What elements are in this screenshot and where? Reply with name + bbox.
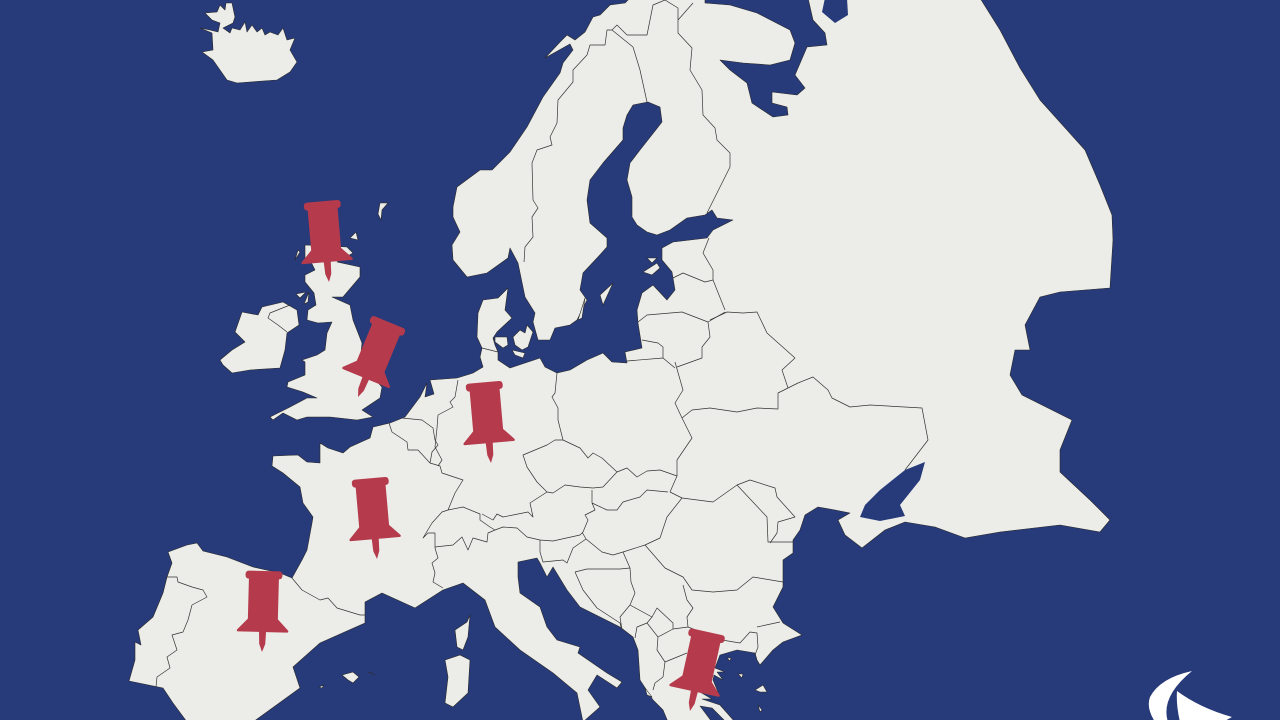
central Europe borders	[495, 373, 682, 563]
pin: Greece	[665, 626, 733, 717]
inland seas	[822, 0, 925, 521]
Sea of Azov	[860, 462, 925, 521]
Scottish isles	[295, 203, 388, 304]
Northern Ireland border	[268, 305, 290, 332]
Great Britain	[270, 245, 382, 420]
Ireland	[220, 302, 299, 373]
eastern Europe borders	[645, 312, 928, 592]
Sardinia	[445, 655, 470, 707]
pin: England	[334, 312, 413, 407]
country borders	[156, 0, 928, 690]
land masses	[129, 0, 1113, 720]
pin: Scotland	[296, 199, 355, 284]
Baltic and Danish islands	[495, 258, 660, 358]
logo: white sail mark	[1149, 671, 1232, 720]
Greek islands	[645, 658, 767, 712]
pin: Germany	[458, 380, 517, 465]
Balkan borders	[575, 552, 780, 690]
Barents inlet	[822, 0, 848, 23]
pin: France	[344, 476, 403, 561]
Balearic islands	[319, 672, 375, 688]
pin: Spain	[236, 570, 290, 653]
Iceland	[200, 3, 297, 83]
western Europe borders	[156, 348, 547, 687]
mainland Europe	[129, 0, 1113, 720]
Baltic and Nordic borders	[524, 0, 730, 368]
Corsica	[455, 615, 470, 650]
